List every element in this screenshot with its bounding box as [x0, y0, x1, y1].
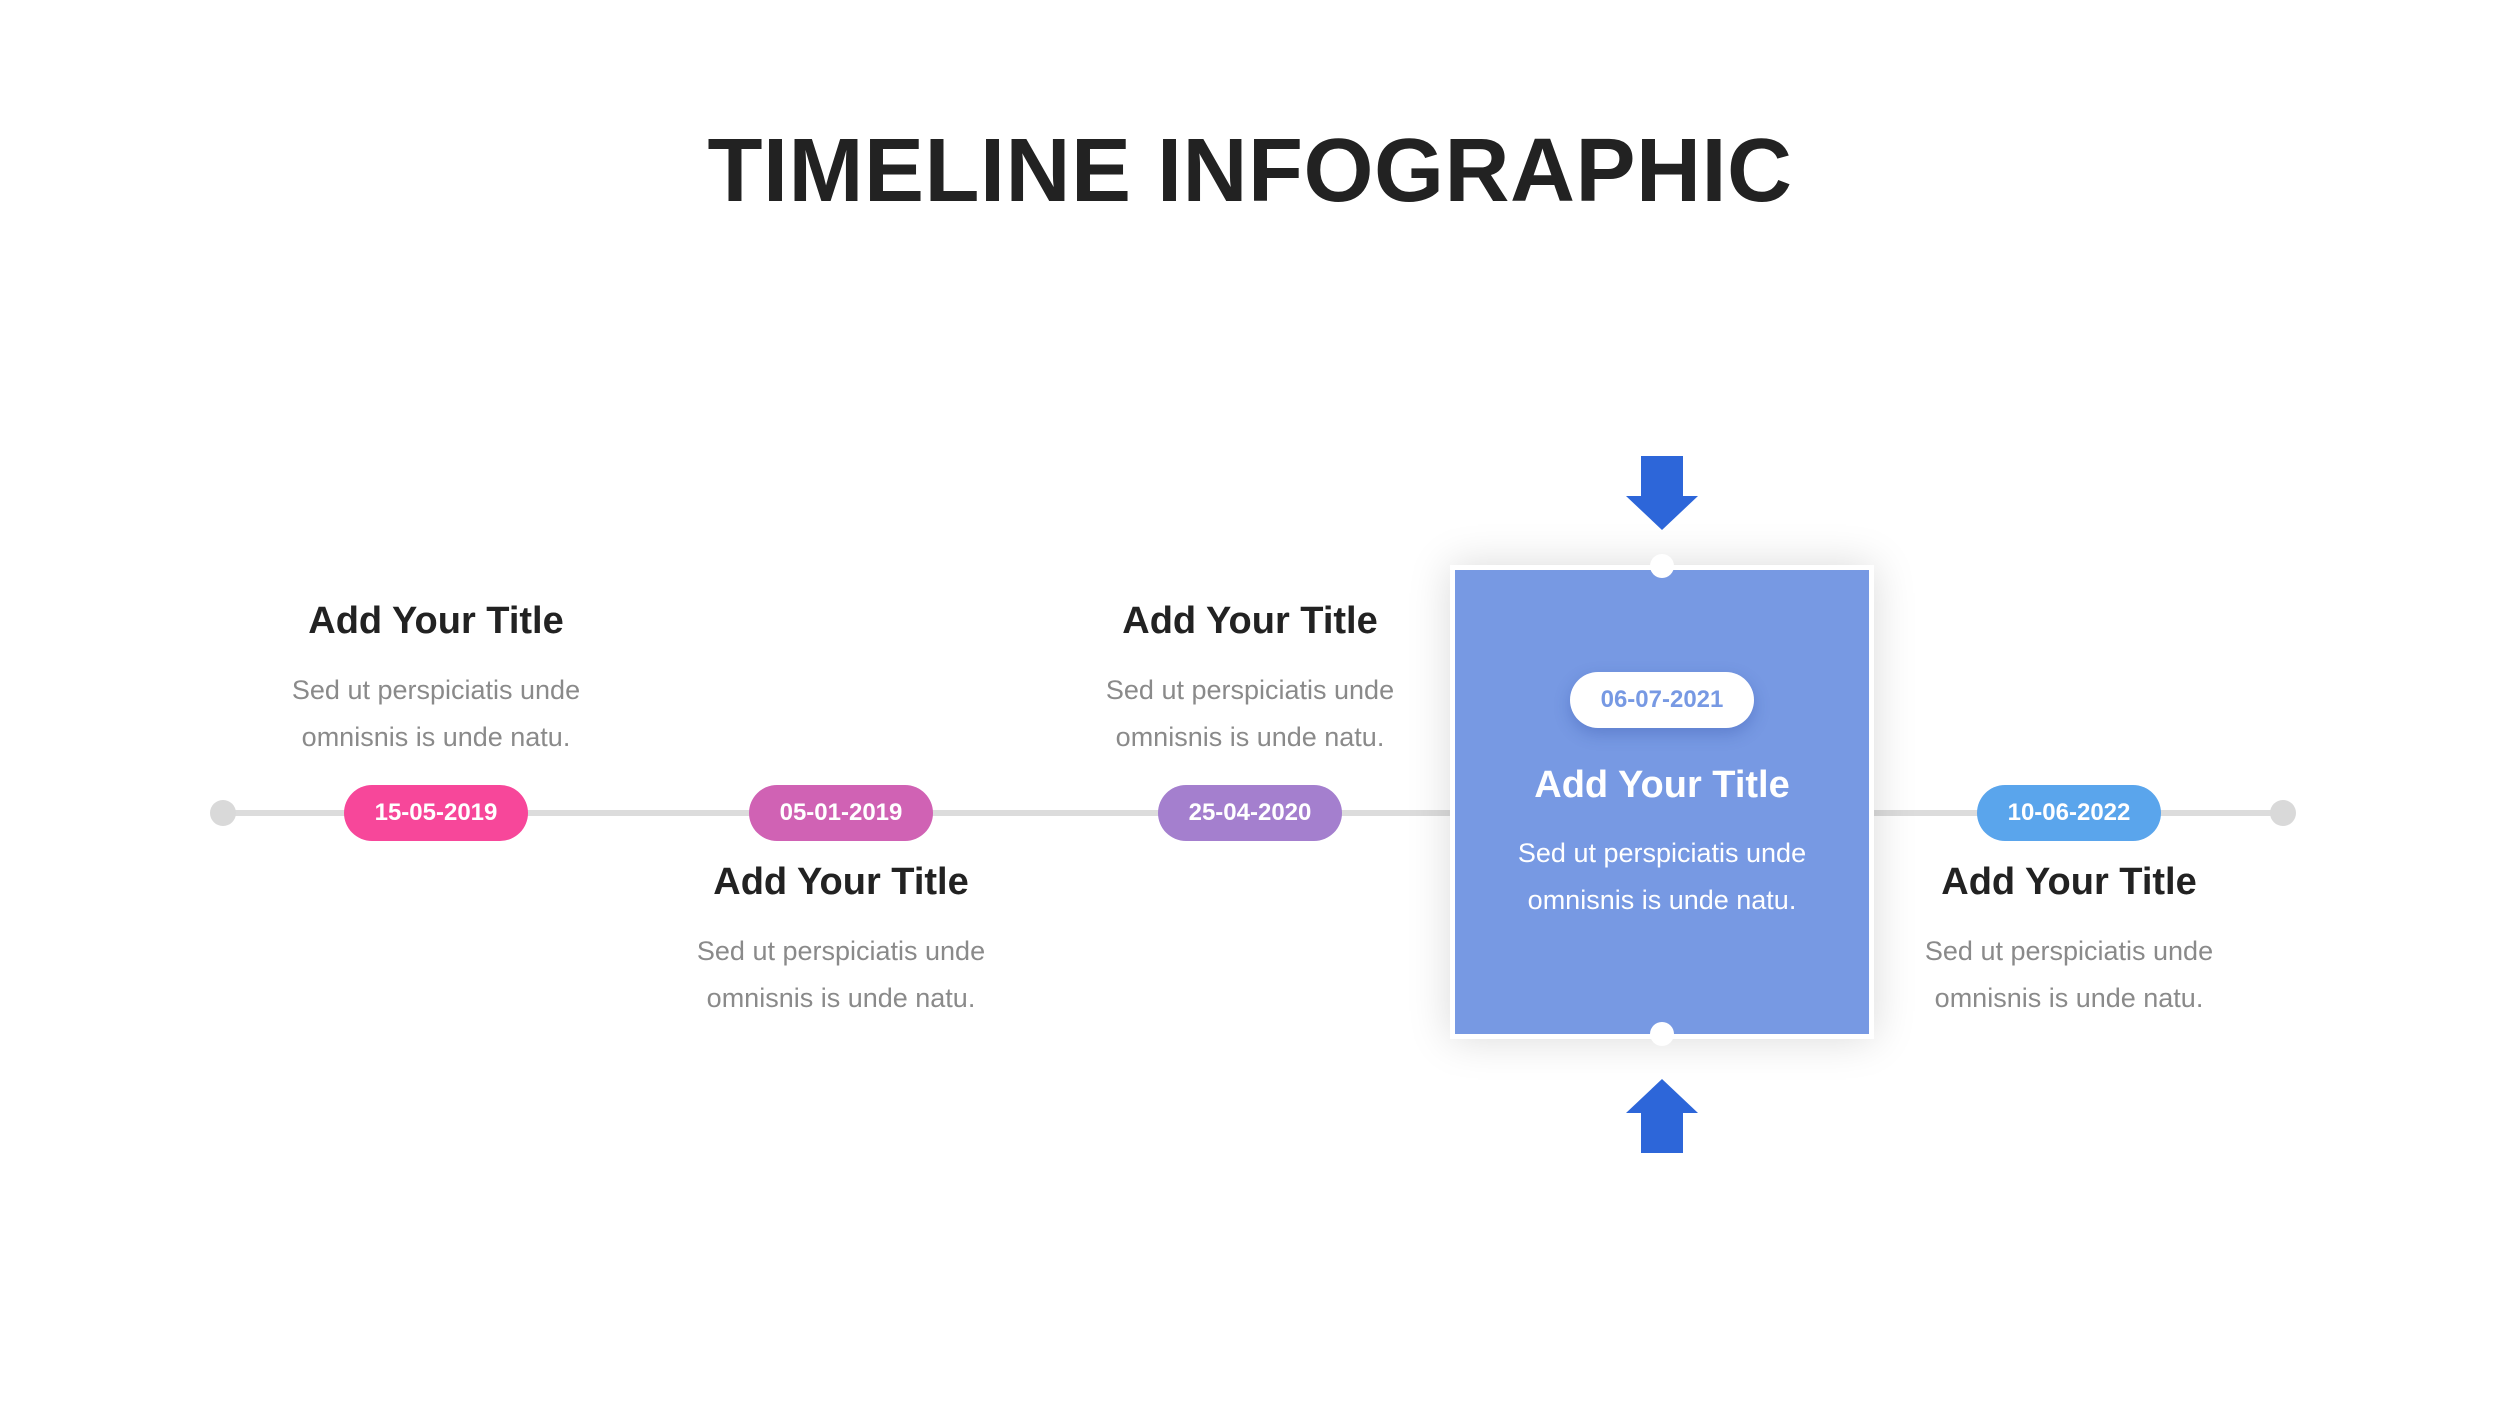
pill 1: [344, 785, 528, 841]
pill 2: 05-01-2019: [780, 799, 902, 826]
item 1 text: [292, 600, 580, 752]
item 5 text: [1925, 861, 2213, 1013]
card desc: omnisnis is unde natu.: [1528, 885, 1796, 915]
highlighted card: [1450, 565, 1874, 1039]
arrow up: [1626, 1079, 1698, 1153]
item 5 desc: [1925, 936, 2213, 1013]
pill 2: [749, 785, 933, 841]
arrow down: [1626, 456, 1698, 530]
item 3 desc: [1106, 675, 1394, 752]
card date pill: 06-07-2021: [1601, 686, 1723, 713]
start dot: [210, 800, 236, 826]
pill 3: 25-04-2020: [1189, 799, 1311, 826]
item 1 desc: [292, 675, 580, 752]
card top dot: [1650, 554, 1674, 578]
item 3 desc: omnisnis is unde natu.: [1116, 722, 1384, 752]
item 3 text: [1106, 600, 1394, 752]
item 1 desc: Sed ut perspiciatis unde: [292, 675, 580, 705]
item 2 desc: [697, 936, 985, 1013]
item 3 desc: Sed ut perspiciatis unde: [1106, 675, 1394, 705]
item 3 title: Add Your Title: [1122, 600, 1378, 642]
item 2 title: Add Your Title: [713, 861, 969, 903]
item 2 desc: Sed ut perspiciatis unde: [697, 936, 985, 966]
item 1 desc: omnisnis is unde natu.: [302, 722, 570, 752]
pill 1: 15-05-2019: [375, 799, 497, 826]
item 1 title: Add Your Title: [308, 600, 564, 642]
end dot: [2270, 800, 2296, 826]
item 5 title: Add Your Title: [1941, 861, 2197, 903]
card desc: Sed ut perspiciatis unde: [1518, 838, 1806, 868]
card title: Add Your Title: [1534, 764, 1790, 806]
card desc: [1518, 838, 1806, 915]
title: TIMELINE INFOGRAPHIC: [708, 121, 1792, 221]
pill 5: 10-06-2022: [2008, 799, 2130, 826]
item 5 desc: omnisnis is unde natu.: [1935, 983, 2203, 1013]
pill 3: [1158, 785, 1342, 841]
item 5 desc: Sed ut perspiciatis unde: [1925, 936, 2213, 966]
item 2 text: [697, 861, 985, 1013]
card date pill: [1570, 672, 1754, 728]
pill 5: [1977, 785, 2161, 841]
timeline line: [224, 810, 2285, 816]
card bottom dot: [1650, 1022, 1674, 1046]
item 2 desc: omnisnis is unde natu.: [707, 983, 975, 1013]
